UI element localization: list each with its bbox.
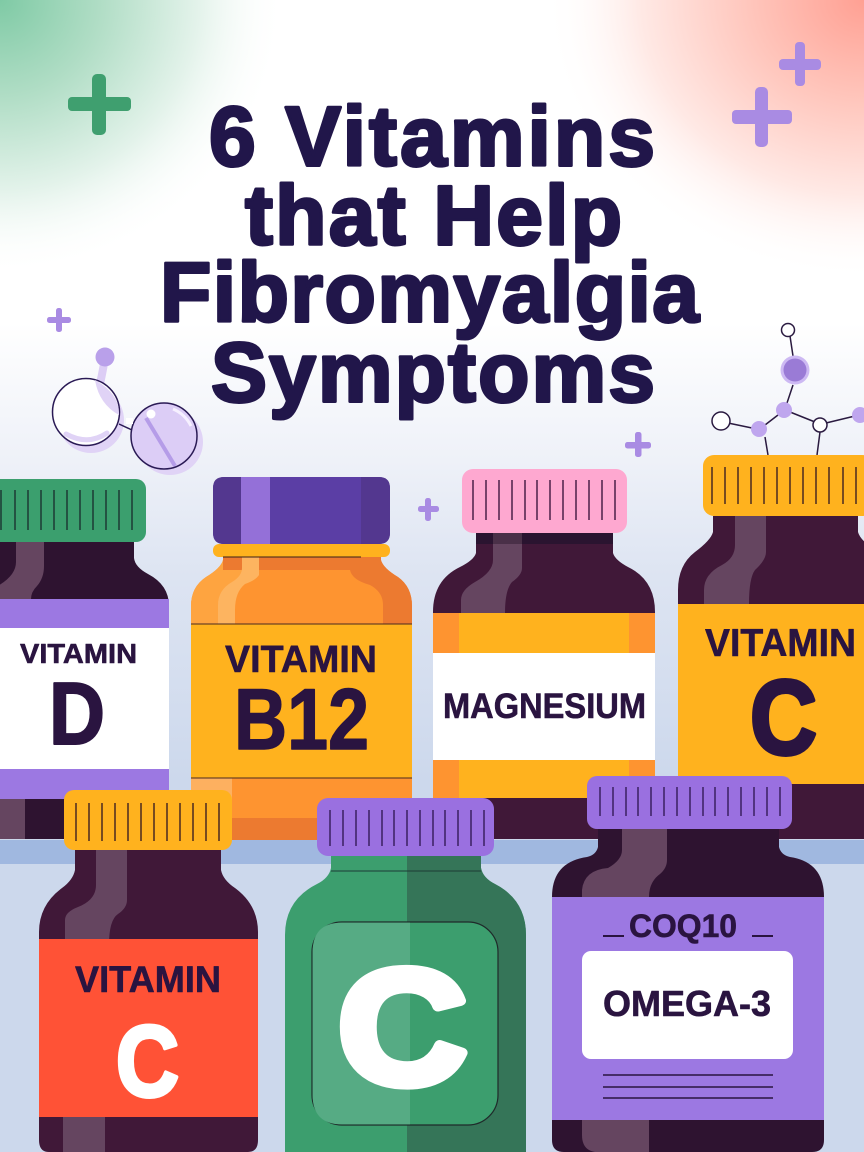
icon: molecule [712,324,864,455]
bottle: omega-3: COQ10 [629,908,737,944]
bottle: vitamin C red: VITAMIN [75,959,221,1000]
icon: tiny plus by bottles [418,498,439,521]
bottle: vitamin C right: VITAMIN [705,622,856,665]
shelf [0,840,864,864]
bottle: magnesium: MAGNESIUM [443,687,646,726]
title: Fibromyalgia [160,246,700,340]
bottle: vitamin B12: VITAMIN [225,639,377,681]
bottle: vitamin D: D [49,664,105,763]
icon: tiny plus left [47,308,71,332]
icon: small purple plus top right [779,42,821,86]
bottle: vitamin D [0,479,169,839]
title [160,90,700,420]
icon: tiny plus centre [625,432,651,457]
bottle: vitamin D: VITAMIN [20,638,137,669]
bottle: omega-3 [552,776,824,1152]
title: Symptoms [211,326,655,420]
bottle: green vitamin C [285,798,526,1152]
icon: green plus [68,74,131,135]
bottle: vitamin B12 [191,477,412,840]
title: 6 Vitamins [209,90,655,184]
bottle: vitamin B12: B12 [234,672,369,768]
bottle: vitamin C red: C [116,1006,179,1118]
bottle: vitamin C red [39,790,258,1152]
bottle: vitamin C right [678,455,864,839]
icon: glasses pill [52,348,203,475]
title: that Help [245,168,622,262]
icon: large purple plus [732,87,792,147]
bottle: magnesium [433,469,655,839]
bottle: omega-3: OMEGA-3 [603,983,771,1024]
bottle: green vitamin C: C [338,937,467,1118]
bottle: vitamin C right: C [750,659,817,777]
